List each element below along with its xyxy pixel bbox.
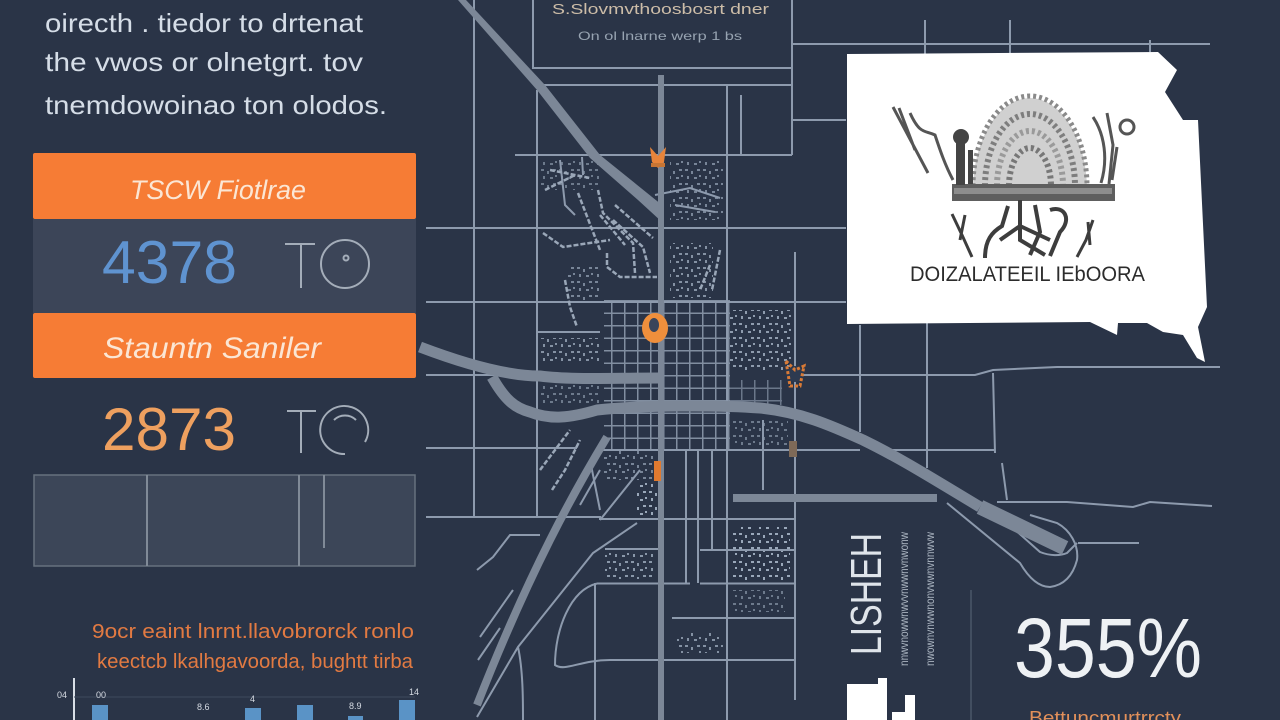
seal caption: DOIZALATEEIL IEbOORA xyxy=(910,263,1145,286)
second stat unit icon xyxy=(287,406,368,454)
state silhouette with seal xyxy=(847,52,1207,362)
bar chart: 04 xyxy=(57,690,67,700)
first stat value: 4378 xyxy=(102,229,237,296)
chart caption: keectcb lkalhgavoorda, bughtt tirba xyxy=(97,651,414,673)
panel: first stat xyxy=(33,153,416,313)
header box: map title xyxy=(552,1,769,43)
first stat heading: TSCW Fiotlrae xyxy=(130,175,306,205)
map xyxy=(420,0,1220,720)
legend text columns: nnwvnowwnwvvnwwnvnwonw xyxy=(897,532,911,666)
marker: south xyxy=(654,461,661,481)
marker: east xyxy=(786,361,804,386)
bar chart: 00 xyxy=(96,690,106,700)
intro text: the vwos or olnetgrt. tov xyxy=(45,47,363,77)
lower figure xyxy=(952,200,1093,258)
streets xyxy=(426,0,1220,720)
map title: S.Slovmvthoosbosrt dner xyxy=(552,1,769,18)
panel: empty table xyxy=(34,475,415,566)
marker: north xyxy=(650,147,666,168)
seal xyxy=(893,96,1145,286)
dome xyxy=(973,96,1087,190)
bar chart: 8.9 xyxy=(349,701,362,711)
bar chart: 8.6 xyxy=(197,702,210,712)
bar chart: 4 xyxy=(250,694,255,704)
panel: second stat xyxy=(33,313,416,463)
bar chart: 14 xyxy=(409,687,419,697)
chart caption xyxy=(92,621,414,673)
city dot blocks xyxy=(540,160,791,653)
second stat heading: Stauntn Saniler xyxy=(103,332,322,365)
curving suburban roads xyxy=(540,170,720,490)
highways xyxy=(458,0,664,720)
location pin xyxy=(642,313,668,343)
chart caption: 9ocr eaint lnrnt.llavobrorck ronlo xyxy=(92,621,414,643)
map markers xyxy=(642,147,804,481)
flanking foliage xyxy=(893,107,1134,184)
second stat value: 2873 xyxy=(102,396,236,463)
big percentage: 355% xyxy=(1014,601,1202,695)
crown base xyxy=(952,184,1115,201)
map subtitle: On ol lnarne werp 1 bs xyxy=(578,29,742,43)
bar chart xyxy=(57,678,419,720)
legend text columns xyxy=(897,532,937,666)
first stat unit icon xyxy=(285,240,369,288)
vertical legend xyxy=(842,532,937,720)
marker: south east xyxy=(789,441,797,457)
downtown grid xyxy=(604,300,782,480)
left beast xyxy=(953,129,973,185)
intro text: tnemdowoinao ton olodos. xyxy=(45,90,387,120)
intro text xyxy=(45,8,387,120)
state mini icon xyxy=(847,678,915,720)
intro text: oirecth . tiedor to drtenat xyxy=(45,8,364,38)
legend text columns: nwownvnwwnonvwwnvnnwvw xyxy=(923,532,937,666)
legend title: LISHEH xyxy=(842,533,891,655)
